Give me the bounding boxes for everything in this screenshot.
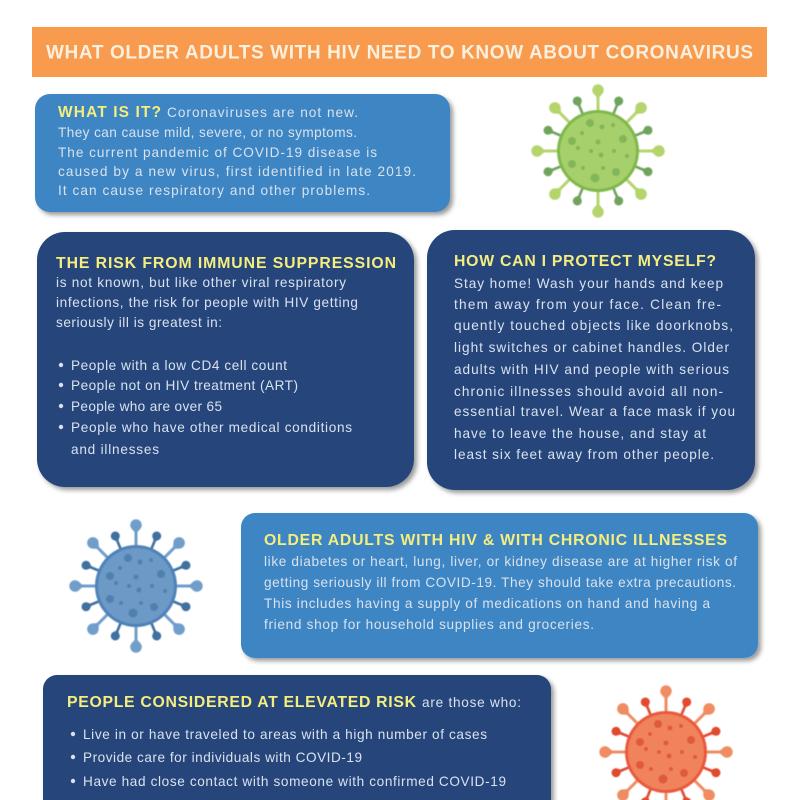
text: protection advice: them away from your face. Clean fre-	[454, 297, 721, 312]
text: chronic illness advice: friend shop for household supplies and groceries.	[264, 617, 594, 632]
list: elevated risk criteria: Live in or have traveled to areas with a high number of cases	[83, 727, 487, 742]
text: chronic illness advice: This includes having a supply of medications on hand and having a	[264, 596, 710, 611]
text: heading continuation: are those who:	[422, 695, 521, 710]
list: elevated risk criteria: Have had close contact with someone with confirmed COVID-19	[83, 774, 506, 789]
list: risk groups: People with a low CD4 cell count	[71, 358, 287, 373]
text: protection advice: light switches or cabinet handles. Older	[454, 340, 729, 355]
text: protection advice: quently touched objects like doorknobs,	[454, 318, 733, 333]
text: definition: Coronaviruses are not new.	[167, 105, 358, 120]
text: protection advice: Stay home! Wash your hands and keep	[454, 276, 723, 291]
heading: what is it: WHAT IS IT?	[58, 104, 161, 121]
panel: chronic illnesses	[241, 513, 758, 658]
text: chronic illness advice: getting seriously ill from COVID-19. They should take extra precautions.	[264, 575, 736, 590]
heading: immune suppression: THE RISK FROM IMMUNE SUPPRESSION	[56, 255, 396, 272]
header banner	[32, 27, 767, 77]
panel: what is it	[35, 94, 450, 212]
list: risk groups: People who are over 65	[71, 399, 222, 414]
list: elevated risk criteria	[71, 727, 506, 789]
text: intro: is not known, but like other viral respiratory	[56, 275, 346, 290]
text: protection advice	[454, 276, 735, 462]
panel: how can I protect myself	[427, 230, 755, 490]
text: definition: The current pandemic of COVID-19 disease is	[58, 145, 377, 160]
heading: elevated risk: PEOPLE CONSIDERED AT ELEVATED RISK	[67, 694, 417, 711]
heading: chronic illnesses: OLDER ADULTS WITH HIV & WITH CHRONIC ILLNESSES	[264, 532, 727, 549]
icon: red virus	[599, 685, 733, 800]
icon: blue virus	[69, 519, 203, 653]
text: protection advice: have to leave the house, and stay at	[454, 426, 706, 441]
text: protection advice: least six feet away from other people.	[454, 447, 714, 462]
panel: risk from immune suppression	[37, 232, 414, 487]
text: intro: infections, the risk for people with HIV getting	[56, 295, 358, 310]
text: protection advice: chronic illnesses should avoid all non-	[454, 384, 723, 399]
text: intro	[56, 275, 358, 330]
text: protection advice: adults with HIV and people with serious	[454, 362, 729, 377]
text: definition	[58, 105, 416, 198]
title: WHAT OLDER ADULTS WITH HIV NEED TO KNOW ABOUT CORONAVIRUS	[46, 42, 753, 64]
list: risk groups: and illnesses	[71, 442, 159, 457]
text: definition: They can cause mild, severe, or no symptoms.	[58, 125, 357, 140]
text: chronic illness advice: like diabetes or heart, lung, liver, or kidney disease are at higher risk of	[264, 554, 737, 569]
text: intro: seriously ill is greatest in:	[56, 315, 222, 330]
text: definition: caused by a new virus, first identified in late 2019.	[58, 164, 416, 179]
text: definition: It can cause respiratory and other problems.	[58, 183, 370, 198]
list: risk groups	[59, 358, 352, 457]
text: protection advice: essential travel. Wear a face mask if you	[454, 404, 735, 419]
heading: protect myself: HOW CAN I PROTECT MYSELF?	[454, 253, 716, 270]
icon: green virus	[531, 84, 665, 218]
panel: elevated risk	[43, 675, 551, 800]
list: risk groups: People who have other medical conditions	[71, 420, 352, 435]
list: risk groups: People not on HIV treatment (ART)	[71, 378, 298, 393]
list: elevated risk criteria: Provide care for individuals with COVID-19	[83, 750, 362, 765]
text: chronic illness advice	[264, 554, 737, 632]
